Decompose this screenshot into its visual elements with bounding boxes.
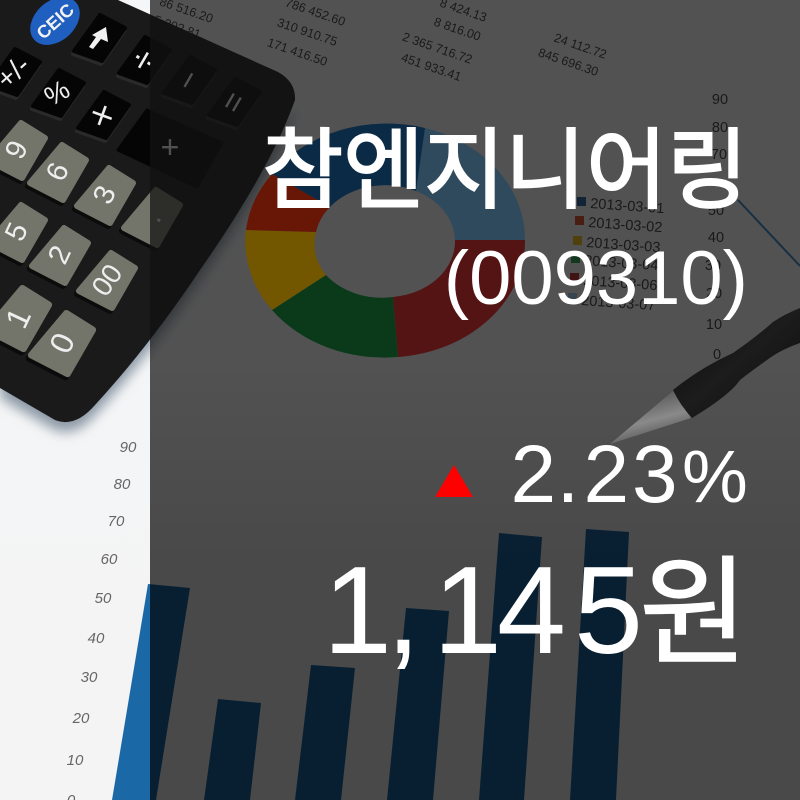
left axis labels: 70: [108, 513, 125, 530]
black operator keys: =: [213, 85, 253, 119]
right axis labels: 30: [705, 258, 721, 274]
table of figures: 8 816.00: [432, 15, 483, 44]
plus key: [118, 110, 222, 187]
right axis labels: 50: [708, 203, 724, 219]
plus key: +: [161, 129, 179, 165]
right axis labels: 90: [712, 92, 728, 108]
grey number keys: 3: [87, 181, 123, 209]
black operator keys: [0, 15, 260, 187]
grey number keys: 6: [40, 158, 76, 186]
left axis labels: 90: [120, 439, 137, 456]
left axis labels: 40: [88, 630, 105, 647]
table of figures: 171 416.50: [265, 35, 329, 69]
stock code: (009310): [444, 236, 748, 321]
line chart segment: [738, 200, 800, 266]
donut legend: 2013-03-04: [584, 253, 659, 274]
pen nib: [610, 391, 691, 444]
grey number keys: 00: [85, 258, 129, 302]
left axis labels: 60: [101, 551, 118, 568]
donut chart: [245, 124, 525, 358]
percent change: 2.23: [510, 429, 678, 520]
donut legend: 2013-03-03: [586, 235, 661, 256]
left axis labels: 80: [114, 476, 131, 493]
black operator keys: ×: [84, 92, 120, 138]
grey number keys: 0: [42, 327, 82, 359]
table of figures: 845 696.30: [536, 45, 600, 79]
table of figures: 5 202.81: [152, 13, 203, 42]
grey number keys: [0, 123, 180, 377]
grey number keys: 5: [0, 218, 35, 246]
table of figures: [152, 0, 608, 84]
bar chart: [112, 529, 629, 800]
arrow glyph: [89, 27, 108, 49]
left axis labels: 30: [81, 669, 98, 686]
grey number keys: .: [136, 207, 168, 227]
price: 원: [639, 548, 748, 680]
donut legend: 2013-03-06: [583, 273, 658, 294]
percent change: %: [682, 435, 748, 518]
left axis labels: 50: [95, 590, 112, 607]
donut legend: 2013-03-01: [590, 196, 665, 217]
icon: red up triangle: [435, 465, 473, 497]
blue CEIC key: CEIC: [33, 0, 78, 43]
left axis labels: [67, 439, 137, 800]
table of figures: 451 933.41: [399, 50, 463, 84]
table of figures: 2 365 716.72: [401, 30, 474, 67]
title: company name: 참엔지니어링: [262, 121, 748, 220]
left axis labels: 20: [72, 710, 90, 727]
calculator body: [0, 0, 295, 422]
right axis labels: 70: [711, 147, 727, 163]
right axis labels: [705, 92, 728, 363]
blue CEIC key: [21, 0, 89, 55]
grey number keys: 9: [0, 136, 35, 164]
donut legend: 2013-03-02: [588, 215, 663, 236]
donut legend: 2013-03-07: [581, 293, 656, 314]
right axis labels: 0: [713, 347, 721, 363]
right axis labels: 20: [706, 286, 722, 302]
black operator keys: ÷: [120, 41, 166, 79]
donut legend: [568, 196, 665, 314]
price: 1,145: [323, 542, 643, 680]
left axis labels: 10: [67, 752, 84, 769]
calculator shadow: [0, 110, 295, 432]
grey number keys: 2: [42, 241, 78, 269]
right axis labels: 40: [708, 230, 724, 246]
table of figures: 24 112.72: [552, 31, 608, 62]
pen barrel: [673, 308, 800, 418]
black operator keys: −: [168, 63, 208, 97]
right axis labels: 80: [712, 120, 728, 136]
calculator: [0, 0, 295, 432]
pen: [610, 308, 800, 444]
table of figures: 310 910.75: [275, 15, 339, 49]
black operator keys: %: [39, 74, 75, 112]
right axis labels: 10: [706, 317, 722, 333]
